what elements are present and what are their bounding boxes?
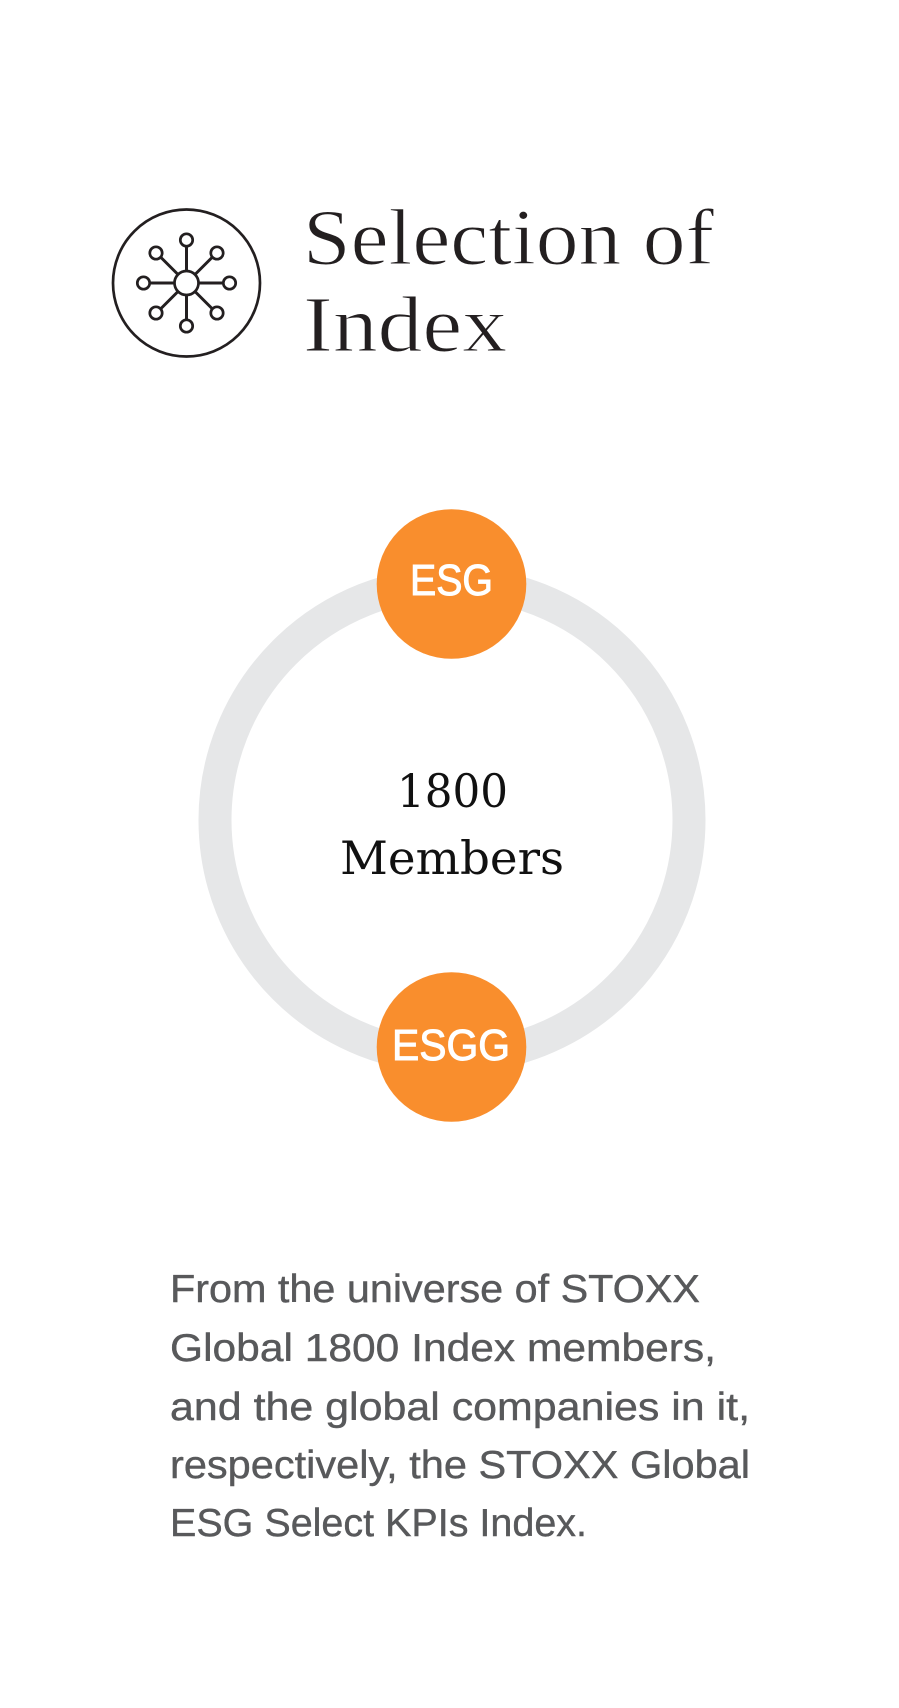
center label: 1800 Members: 1800 (397, 764, 508, 818)
description text: Global 1800 Index members, (170, 1327, 716, 1370)
description text: From the universe of STOXX (170, 1268, 700, 1311)
icon: network hub (113, 210, 260, 356)
title (303, 195, 715, 369)
badge: ESGG: ESGG (392, 1021, 510, 1070)
title: Index (303, 282, 507, 369)
description text: and the global companies in it, (170, 1386, 750, 1429)
description text: ESG Select KPIs Index. (170, 1502, 587, 1545)
badge: ESG (377, 509, 526, 659)
header: icon and title (113, 195, 715, 369)
center label: 1800 Members: Members (340, 831, 564, 885)
badge: ESG: ESG (410, 556, 493, 605)
badge: ESGG (377, 972, 526, 1122)
description text: respectively, the STOXX Global (170, 1444, 750, 1487)
description text (170, 1268, 750, 1545)
center label: 1800 Members (340, 764, 564, 885)
diagram: member ring (215, 509, 689, 1122)
ring (215, 583, 689, 1057)
title: Selection of (303, 195, 715, 282)
